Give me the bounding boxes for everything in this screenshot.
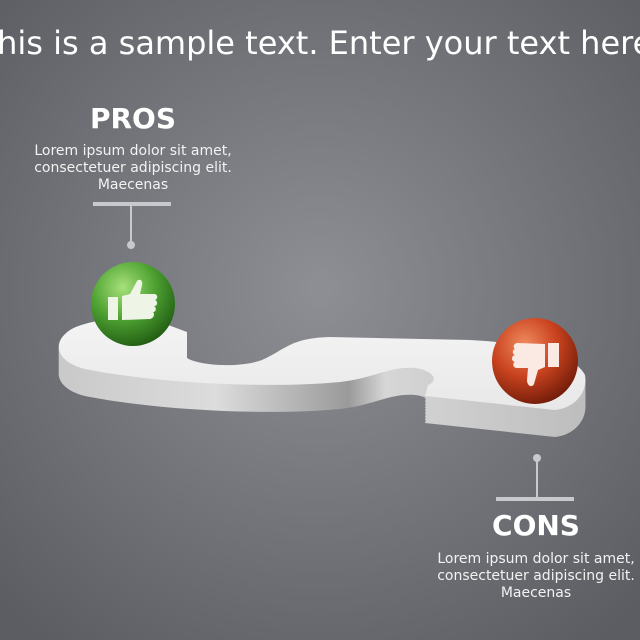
pros text: consectetuer adipiscing elit. [34, 160, 232, 176]
pros text: Lorem ipsum dolor sit amet, [34, 143, 232, 159]
cons connector [496, 454, 574, 499]
cons heading: CONS [492, 509, 580, 542]
cons text: Maecenas [501, 585, 571, 601]
icon: red thumbs down ball [492, 318, 578, 404]
cons text: consectetuer adipiscing elit. [437, 568, 635, 584]
pros heading: PROS [90, 102, 176, 135]
cons text: Lorem ipsum dolor sit amet, [437, 551, 635, 567]
pros connector [93, 204, 171, 249]
icon: green thumbs up ball [91, 262, 175, 346]
S-shaped platform [59, 318, 585, 437]
pros text: Maecenas [98, 177, 168, 193]
